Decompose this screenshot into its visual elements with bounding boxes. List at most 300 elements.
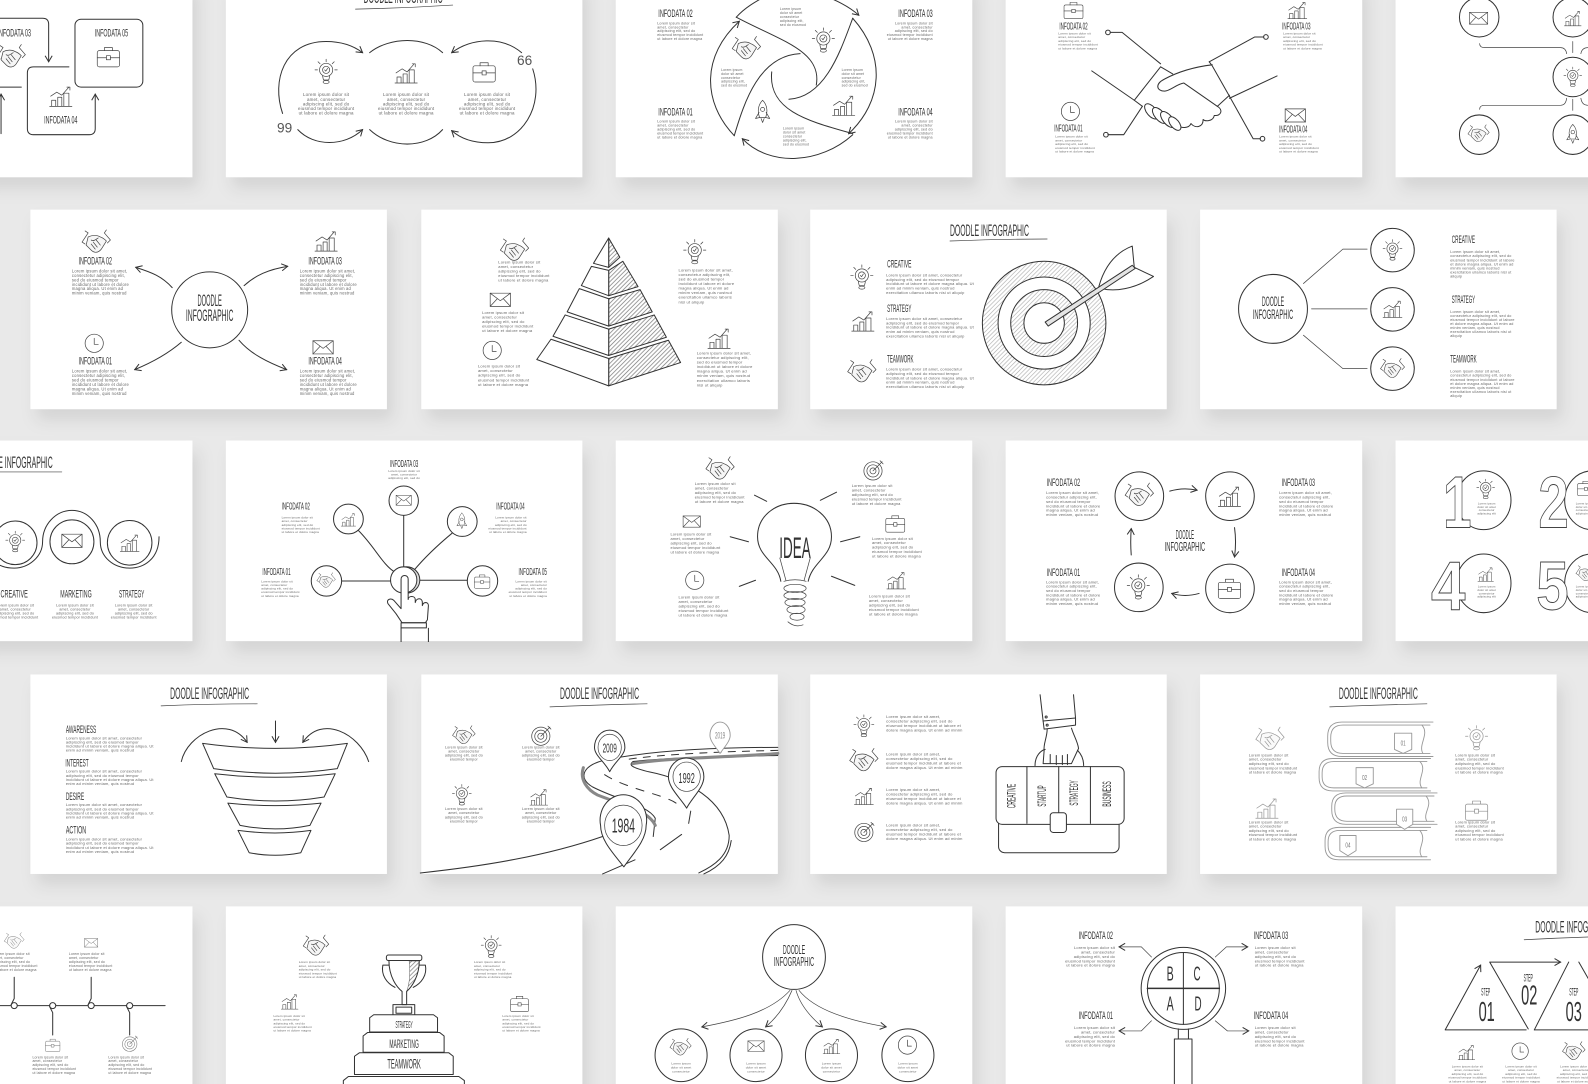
- text: infodata 02: Lorem ipsum dolor sit: [282, 516, 313, 520]
- text: infodata 02: magna aliqua. Ut enim ad: [72, 286, 124, 291]
- panel: step triangles (row 5, slide 5): [1396, 906, 1588, 1084]
- text: top left: eiusmod tempor incididunt: [498, 273, 550, 278]
- pin inner 2009: [598, 734, 621, 761]
- text: bottom 1: Lorem ipsum dolor sit: [32, 1055, 68, 1059]
- icon: bulb: [1477, 479, 1495, 499]
- text: top right: ut labore et dolore magna: [474, 975, 512, 979]
- text: infodata 02: incididunt ut labore et dolore: [1046, 503, 1101, 508]
- text: bottom right: eiusmod tempor: [527, 819, 555, 823]
- text: infodata 04: minim veniam, quis nostrud: [1279, 601, 1331, 606]
- text: bottom 2: adipiscing elit, sed do: [108, 1063, 144, 1067]
- text: mid left: ut labore et dolore magna: [482, 328, 533, 333]
- text: infodata 04: adipiscing elit, sed do: [495, 523, 527, 527]
- text: bottom left: ut labore et dolore magna: [1249, 837, 1297, 841]
- text: item 1: Lorem ipsum dolor sit amet,: [886, 714, 940, 719]
- text: creative: Lorem ipsum dolor sit amet,: [1450, 250, 1500, 254]
- icon: chart: [1256, 799, 1278, 818]
- text: interest: Lorem ipsum dolor sit amet, consectetur: [66, 769, 143, 774]
- panel: step triangles (row 5, slide 5): STEP: [1524, 972, 1533, 984]
- text: creative: incididunt ut labore et dolore magna aliqua. Ut: [886, 281, 975, 286]
- text: infodata 01: adipiscing elit, sed do: [261, 587, 293, 591]
- title underline: [950, 239, 1047, 241]
- icon: chart: [832, 96, 855, 115]
- text: awareness: Lorem ipsum dolor sit amet, consectetur: [66, 735, 143, 740]
- text: bottom 1: adipiscing elit, sed do: [32, 1063, 68, 1067]
- text: top left: Lorem ipsum dolor sit: [299, 960, 330, 964]
- text: bottom left: Lorem ipsum dolor sit: [1249, 820, 1289, 824]
- panel: three circles loop (row 1, slide 2): [226, 0, 582, 177]
- text: mid right: ut labore et dolore magna: [872, 554, 921, 559]
- text: bottom left: eiusmod tempor: [450, 819, 479, 823]
- icon: rocket: [457, 513, 467, 529]
- panel: tree with three circles (row 2, slide 4): INFOGRAPHIC: [1253, 307, 1293, 323]
- connector line: [0, 86, 21, 88]
- connector left: [0, 94, 2, 134]
- hub spokes: [341, 515, 467, 581]
- text: top left: eiusmod tempor incididunt: [657, 33, 703, 37]
- text: centre: adipiscing elit, sed do: [383, 101, 430, 106]
- text: infodata 01: sed do eiusmod tempor: [1046, 588, 1091, 593]
- text: infodata 05: ut labore et dolore magna: [509, 594, 547, 598]
- text: bottom right: adipiscing elit, sed do: [895, 127, 933, 131]
- icon: clock: [1512, 1043, 1528, 1059]
- text: step 1: amet, consectetur: [1454, 1068, 1480, 1072]
- text: item 1: consectetur adipiscing elit, sed do: [886, 719, 953, 724]
- text: top right: adipiscing elit, sed do: [1455, 762, 1495, 766]
- book stack: [1319, 722, 1437, 860]
- funnel tiers: [203, 743, 347, 855]
- text: item 3: consectetur adipiscing elit, sed do: [886, 791, 953, 796]
- text: creative: Lorem ipsum dolor sit amet, consectetur: [886, 272, 963, 277]
- text: creative: amet, consectetur: [0, 608, 32, 612]
- text: item 3: eiusmod tempor incididunt ut labore et: [886, 796, 962, 801]
- icon: mail: [85, 939, 98, 947]
- briefcase body: [996, 767, 1124, 853]
- text: top right: exercitation ullamco laboris: [679, 295, 732, 300]
- icon: bulb: [1465, 726, 1488, 750]
- letter A: A: [1167, 994, 1174, 1016]
- text: infodata 04: magna aliqua. Ut enim ad: [300, 386, 352, 391]
- panel: hand pressing hub (row 3, slide 2): INFODATA 05: [519, 567, 547, 578]
- icon: target: [855, 822, 874, 842]
- icon: chart: [1478, 568, 1493, 581]
- text: infodata 03: minim veniam, quis nostrud: [1279, 512, 1331, 517]
- text: infodata 04: incididunt ut labore et dolore: [300, 382, 357, 387]
- text: top right: eiusmod tempor incididunt: [887, 33, 933, 37]
- text: infodata 04: ut labore et dolore magna: [1255, 1043, 1304, 1048]
- panel: trophy on steps (row 5, slide 2): [226, 906, 582, 1084]
- circles: [1115, 472, 1254, 613]
- text: bottom 2: Lorem ipsum dolor sit: [108, 1055, 144, 1059]
- text: top left: amet, consectetur: [299, 964, 325, 968]
- panel: magnifying glass (row 5, slide 4): INFODATA 03: [1254, 930, 1288, 942]
- circles and connectors: [1459, 0, 1588, 154]
- icon: mail: [490, 293, 510, 306]
- text: infodata 05: eiusmod tempor incididunt: [509, 590, 547, 594]
- text: bottom left: adipiscing elit, sed do: [1249, 829, 1289, 833]
- label: 1984: 1984: [612, 815, 635, 837]
- text: infodata 03: sed do eiusmod tempor: [300, 277, 347, 282]
- text: infodata 03: incididunt ut labore et dolore: [300, 282, 357, 287]
- numeral 2: 2: [1538, 463, 1569, 544]
- icon: handshake: [1256, 727, 1284, 750]
- text: infodata 01: magna aliqua. Ut enim ad: [72, 386, 124, 391]
- text: infodata 03: Lorem ipsum dolor sit: [1283, 31, 1316, 35]
- text: centre: eiusmod tempor incididunt: [378, 106, 435, 111]
- text: infodata 03: eiusmod tempor incididunt: [1255, 958, 1305, 963]
- text: item 2: consectetur adipiscing elit, sed do: [886, 756, 953, 761]
- icon: chart: [1218, 487, 1241, 506]
- text: mid right: adipiscing elit, sed do: [872, 545, 914, 550]
- text: infodata 01: minim veniam, quis nostrud: [72, 391, 127, 396]
- panel: funnel (row 4, slide 1): INTEREST: [65, 758, 89, 770]
- text: left: Lorem ipsum dolor sit: [303, 92, 350, 97]
- panel: spiral cycle (row 1, slide 3): INFODATA 02: [658, 8, 693, 20]
- panel: tree with four circles (row 5, slide 3): INFOGRAPHIC: [774, 954, 814, 969]
- text: teamwork: eiusmod tempor incididunt ut labore: [1450, 378, 1515, 382]
- text: infodata 03: consectetur adipiscing elit,: [1279, 495, 1330, 500]
- text: infodata 04: magna aliqua. Ut enim ad: [1279, 597, 1328, 602]
- text: infodata 05: Lorem ipsum dolor sit: [516, 579, 547, 583]
- icon: target: [864, 461, 883, 480]
- arrow: infodata 03 frame: [0, 18, 49, 62]
- text: wedge left: sed do eiusmod: [721, 84, 747, 88]
- text: top 2: adipiscing elit, sed do: [69, 960, 105, 964]
- text: top 2: ut labore et dolore magna: [69, 968, 112, 972]
- icon: handshake: [0, 45, 25, 67]
- bookmark 03: [1397, 809, 1413, 829]
- text: item 1: adipiscing elit: [1477, 512, 1496, 516]
- text: infodata 02: Lorem ipsum dolor sit: [1058, 31, 1091, 35]
- text: mid left: Lorem ipsum dolor sit: [670, 532, 712, 537]
- text: bottom 2: ut labore et dolore magna: [108, 1071, 151, 1075]
- text: infodata 02: eiusmod tempor incididunt: [1065, 958, 1116, 963]
- text: top right: Lorem ipsum dolor sit amet,: [679, 267, 733, 272]
- icon: bulb: [684, 240, 706, 264]
- panel: wave with circles (row 3, slide 1): MARKETING: [60, 588, 92, 600]
- road edges: [420, 747, 778, 874]
- text: item 4: consectetur adipiscing elit, sed do: [886, 827, 953, 832]
- icon: handshake: [82, 230, 110, 252]
- text: infodata 01: eiusmod tempor incididunt: [261, 590, 300, 594]
- panel: funnel (row 4, slide 1): AWARENESS: [66, 724, 96, 736]
- timeline nodes: [11, 1003, 133, 1009]
- text: wedge left: adipiscing elit,: [721, 80, 745, 84]
- text: infodata 01: eiusmod tempor incididunt: [1065, 1038, 1116, 1043]
- text: bottom right: eiusmod tempor incididunt: [869, 607, 920, 612]
- text: infodata 03: minim veniam, quis nostrud: [300, 291, 355, 296]
- text: infodata 02: Lorem ipsum dolor sit amet,: [1046, 490, 1099, 495]
- text: bottom left: amet, consectetur: [1249, 825, 1282, 829]
- wave line: [0, 510, 159, 568]
- box: infodata 05: [75, 19, 143, 87]
- number 02: 02: [1521, 980, 1537, 1011]
- text: mid left: amet, consectetur: [482, 314, 517, 319]
- icon: bulb: [812, 28, 835, 52]
- text: infodata 02: adipiscing elit, sed do: [282, 523, 313, 527]
- panel: handshake (row 1, slide 4): INFODATA 02: [1059, 21, 1088, 32]
- panel: magnifying glass (row 5, slide 4): INFODATA 02: [1079, 930, 1113, 942]
- magnifier: [1141, 947, 1226, 1084]
- title underline: [550, 704, 647, 707]
- number 01: 01: [1479, 996, 1495, 1027]
- numeral 5: 5: [1536, 548, 1569, 625]
- panel: funnel (row 4, slide 1): ACTION: [66, 824, 86, 836]
- icon: briefcase: [1465, 801, 1488, 820]
- bookmark label 04: 04: [1345, 842, 1351, 850]
- text: bottom right: consectetur adipiscing elit,: [697, 355, 749, 360]
- text: top left: ut labore et dolore magna: [695, 499, 744, 504]
- text: creative: exercitation ullamco laboris nisi ut: [1450, 270, 1512, 274]
- pin: 1992: [668, 758, 704, 808]
- text: bottom left: amet, consectetur: [679, 599, 713, 604]
- icon: chart: [823, 1039, 840, 1054]
- arrow: infodata 04 frame: [27, 67, 95, 135]
- text: awareness: enim ad minim veniam, quis nostrud: [66, 748, 134, 753]
- text: bottom right: Lorem ipsum dolor sit: [1455, 820, 1496, 824]
- text: infodata 02: ut labore et dolore magna: [282, 530, 319, 534]
- text: mid left: Lorem ipsum dolor sit: [482, 310, 525, 315]
- text: circle 1: dolor sit amet: [671, 1065, 691, 1069]
- panel: tree with three circles (row 2, slide 4): TEAMWORK: [1450, 354, 1477, 366]
- panel: handshake (row 1, slide 4): INFODATA 03: [1282, 21, 1311, 32]
- text: infodata 02: minim veniam, quis nostrud: [1046, 512, 1098, 517]
- circles: [0, 520, 152, 565]
- text: infodata 03: adipiscing elit, sed do: [1283, 39, 1316, 43]
- icon: clock: [85, 334, 103, 352]
- text: circle 1: Lorem ipsum: [671, 1061, 691, 1065]
- connector lines: [1480, 42, 1588, 110]
- text: infodata 03: ut labore et dolore magna: [1255, 963, 1304, 968]
- text: top left: ut labore et dolore magna: [657, 37, 703, 41]
- text: top left: Lorem ipsum dolor sit: [695, 481, 736, 486]
- icon: chart: [854, 788, 873, 805]
- text: item 4: dolor sit amet: [1477, 588, 1496, 592]
- circles: [1456, 471, 1588, 613]
- text: infodata 05: amet, consectetur: [521, 583, 547, 587]
- trophy: [382, 955, 426, 1016]
- text: infodata 04: eiusmod tempor incididunt: [488, 526, 527, 530]
- text: circle 3: Lorem ipsum: [822, 1061, 841, 1065]
- text: bottom right: adipiscing elit, sed do: [522, 815, 560, 819]
- text: infodata 01: adipiscing elit, sed do: [1055, 142, 1088, 146]
- text: creative: adipiscing elit, sed do eiusmod tempor: [886, 277, 960, 282]
- text: bottom left: ut labore et dolore magna: [273, 1029, 311, 1033]
- panel: timeline (row 5, slide 1): [0, 906, 192, 1084]
- text: wedge right: Lorem ipsum: [842, 68, 863, 72]
- text: infodata 01: amet, consectetur: [261, 583, 287, 587]
- panel: target and dart (row 2, slide 3): DOODLE INFOGRAPHIC: [950, 222, 1029, 240]
- text: centre: Lorem ipsum dolor sit: [383, 92, 430, 97]
- text: desire: enim ad minim veniam, quis nostrud: [66, 815, 134, 820]
- text: creative: minim veniam, quis nostrud: [1450, 266, 1500, 270]
- panel: funnel (row 4, slide 1): DOODLE INFOGRAPHIC: [170, 685, 249, 703]
- icon: clock: [686, 571, 704, 589]
- text: top right: amet, consectetur: [852, 488, 886, 493]
- text: bottom right: adipiscing elit, sed do: [869, 602, 911, 607]
- text: bottom left: adipiscing elit, sed do: [445, 815, 483, 819]
- text: bottom right: amet, consectetur: [901, 123, 933, 127]
- icon: briefcase: [45, 1039, 60, 1052]
- text: circle 4: dolor sit amet: [898, 1065, 918, 1069]
- text: top left: Lorem ipsum dolor sit: [445, 745, 483, 749]
- panel: wave with circles (row 3, slide 1): CREATIVE: [1, 588, 28, 600]
- text: infodata 01: incididunt ut labore et dolore: [1046, 592, 1101, 597]
- text: infodata 01: Lorem ipsum dolor sit: [1074, 1025, 1116, 1030]
- text: teamwork: incididunt ut labore et dolore magna aliqua. Ut: [886, 375, 975, 380]
- icon: briefcase: [1064, 2, 1083, 19]
- panel: four circle cycle (row 3, slide 4): INFODATA 03: [1282, 477, 1315, 489]
- icon: bulb: [854, 715, 874, 737]
- icon: chart: [1458, 1045, 1475, 1060]
- text: infodata 04: consectetur adipiscing elit,: [1279, 584, 1330, 589]
- text: bottom left: Lorem ipsum dolor sit: [273, 1014, 305, 1018]
- icon: briefcase: [97, 48, 120, 67]
- central circle: [1239, 274, 1307, 343]
- text: infodata 04: incididunt ut labore et dolore: [1279, 592, 1334, 597]
- text: centre: amet, consectetur: [387, 97, 426, 102]
- panel: road timeline (row 4, slide 2): 1992: [679, 770, 695, 787]
- panel: spiral cycle (row 1, slide 3): INFODATA 04: [898, 106, 933, 118]
- text: top left: adipiscing elit, sed do: [299, 968, 331, 972]
- text: marketing: amet, consectetur: [59, 608, 91, 612]
- arrows: [135, 266, 288, 370]
- text: top left: amet, consectetur: [1249, 758, 1282, 762]
- text: bottom 1: ut labore et dolore magna: [32, 1071, 75, 1075]
- text: infodata 01: eiusmod tempor incididunt: [1055, 146, 1095, 150]
- text: top left: amet, consectetur: [657, 25, 689, 29]
- icon: handshake: [453, 726, 475, 744]
- panel: spiral cycle (row 1, slide 3): INFODATA 03: [898, 8, 933, 20]
- text: step 2: eiusmod tempor incididunt: [1502, 1076, 1540, 1080]
- text: strategy: adipiscing elit, sed do eiusmod tempor: [886, 320, 960, 325]
- text: top right: Lorem ipsum dolor sit: [522, 745, 560, 749]
- text: infodata 02: amet, consectetur: [1058, 35, 1085, 39]
- text: top left: adipiscing elit, sed do: [445, 753, 483, 757]
- text: right: eiusmod tempor incididunt: [459, 106, 516, 111]
- text: bottom right: exercitation ullamco laboris: [697, 378, 750, 383]
- text: wedge bottom: adipiscing elit,: [783, 138, 807, 142]
- text: infodata 01: adipiscing elit, sed do: [1074, 1034, 1116, 1039]
- text: item 2: eiusmod tempor incididunt ut labore et: [886, 761, 962, 766]
- text: infodata 01: consectetur adipiscing elit,: [72, 373, 125, 378]
- panel: stack of books (row 4, slide 4): [1200, 674, 1557, 874]
- text: infodata 02: Lorem ipsum dolor sit amet,: [72, 268, 128, 273]
- panel: central circle with four arrows (row 2, slide 1): INFODATA 04: [308, 356, 342, 368]
- text: infodata 03: amet, consectetur: [1255, 949, 1289, 954]
- text: wedge bottom: dolor sit amet: [783, 131, 805, 135]
- icon: bulb: [452, 784, 471, 805]
- panel: briefcase with hand (row 4, slide 3): [810, 674, 1167, 874]
- text: strategy: Lorem ipsum dolor sit amet, consectetur: [886, 316, 963, 321]
- text: infodata 04: amet, consectetur: [1255, 1029, 1289, 1034]
- text: strategy: exercitation ullamco laboris nisi ut aliquip: [886, 333, 965, 338]
- panel: four circle cycle (row 3, slide 4): INFODATA 02: [1047, 477, 1080, 489]
- panel: magnifying glass (row 5, slide 4): INFODATA 01: [1079, 1010, 1113, 1022]
- icon: briefcase: [474, 575, 490, 588]
- panel: stack of books (row 4, slide 4): DOODLE INFOGRAPHIC: [1339, 685, 1418, 703]
- text: bottom left: eiusmod tempor incididunt: [478, 377, 530, 382]
- icon: handshake: [1125, 483, 1154, 505]
- text: top right: ut labore et dolore magna: [1455, 771, 1503, 775]
- text: bottom right: Lorem ipsum dolor sit: [895, 120, 933, 124]
- text: top right: amet, consectetur: [901, 25, 933, 29]
- title underline: [355, 5, 453, 9]
- text: infodata 02: consectetur adipiscing elit,: [72, 273, 125, 278]
- text: bottom left: adipiscing elit, sed do: [657, 127, 695, 131]
- text: item 1: Lorem ipsum: [1478, 501, 1496, 505]
- text: wedge bottom: Lorem ipsum: [783, 127, 804, 131]
- text: step 1: Lorem ipsum dolor sit: [1452, 1064, 1483, 1068]
- text: infodata 01: ut labore et dolore magna: [1055, 150, 1094, 154]
- icon: handshake: [706, 457, 734, 479]
- text: strategy: eiusmod tempor incididunt ut labore: [1450, 318, 1515, 322]
- panel: tree with three circles (row 2, slide 4): DOODLE: [1262, 294, 1284, 310]
- icon: chart: [120, 535, 139, 551]
- text: infodata 02: adipiscing elit, sed do: [1074, 954, 1116, 959]
- panel: flow boxes (row 1, slide 1): [0, 0, 192, 177]
- text: bottom right: amet, consectetur: [502, 1018, 528, 1022]
- icon: mail: [396, 495, 411, 505]
- panel: idea light bulb (row 3, slide 3): [616, 441, 972, 641]
- text: bottom left: ut labore et dolore magna: [679, 612, 728, 617]
- text: bottom right: Lorem ipsum dolor sit: [869, 593, 911, 598]
- title underline: [1330, 704, 1427, 707]
- text: step 2: amet, consectetur: [1508, 1068, 1534, 1072]
- text: infodata 03: incididunt ut labore et dolore: [1279, 503, 1334, 508]
- text: infodata 01: Lorem ipsum dolor sit amet,: [1046, 579, 1099, 584]
- text: interest: adipiscing elit, sed do eiusmod tempor: [66, 773, 139, 778]
- panel: funnel (row 4, slide 1): [30, 674, 387, 874]
- timeline line: [0, 1005, 165, 1007]
- icon: chart: [395, 64, 417, 83]
- text: step 2: ut labore et dolore magna: [1502, 1079, 1540, 1083]
- text: bottom right: sed do eiusmod tempor: [697, 360, 743, 365]
- text: item 1: dolore magna aliqua. Ut enim ad minim: [886, 728, 963, 733]
- icon: chart: [530, 790, 548, 805]
- text: top right: consectetur adipiscing elit,: [679, 272, 731, 277]
- letter B: B: [1167, 963, 1174, 985]
- icon: mail: [683, 516, 700, 527]
- text: infodata 02: Lorem ipsum dolor sit: [1074, 945, 1116, 950]
- panel: big numbers (row 3, slide 5): [1396, 441, 1588, 641]
- icon: chart: [50, 87, 72, 106]
- text: infodata 03: magna aliqua. Ut enim ad: [1279, 508, 1328, 513]
- text: top left: amet, consectetur: [448, 749, 480, 753]
- text: teamwork: exercitation ullamco laboris nisi ut: [1450, 390, 1512, 394]
- text: action: incididunt ut labore et dolore magna aliqua. Ut: [66, 845, 154, 850]
- text: top right: ut labore et dolore magna: [852, 501, 901, 506]
- panel: road timeline (row 4, slide 2): DOODLE INFOGRAPHIC: [560, 685, 639, 703]
- text: bottom left: ut labore et dolore magna: [657, 135, 703, 139]
- text: circle 3: dolor sit amet: [821, 1065, 842, 1069]
- text: left: adipiscing elit, sed do: [303, 101, 350, 106]
- text: strategy: enim ad minim veniam, quis nostrud: [886, 329, 955, 334]
- text: infodata 04: consectetur adipiscing elit,: [300, 373, 353, 378]
- icon: chart: [887, 573, 906, 589]
- text: step 1: eiusmod tempor incididunt: [1448, 1076, 1487, 1080]
- text: strategy: exercitation ullamco laboris nisi ut: [1450, 330, 1512, 334]
- text: infodata 01: sed do eiusmod tempor: [72, 378, 119, 383]
- text: top right: incididunt ut labore et dolore: [679, 281, 735, 286]
- panel: spiral cycle (row 1, slide 3): [616, 0, 972, 177]
- text: infodata 03: consectetur adipiscing elit,: [300, 273, 353, 278]
- text: bottom right: eiusmod tempor incididunt: [1455, 833, 1505, 837]
- text: infodata 03: eiusmod tempor incididunt: [1283, 43, 1323, 47]
- connector lines with dots: [1104, 30, 1268, 141]
- text: bottom left: Lorem ipsum dolor sit: [657, 120, 695, 124]
- panel: hand pressing hub (row 3, slide 2): INFODATA 03: [390, 459, 418, 470]
